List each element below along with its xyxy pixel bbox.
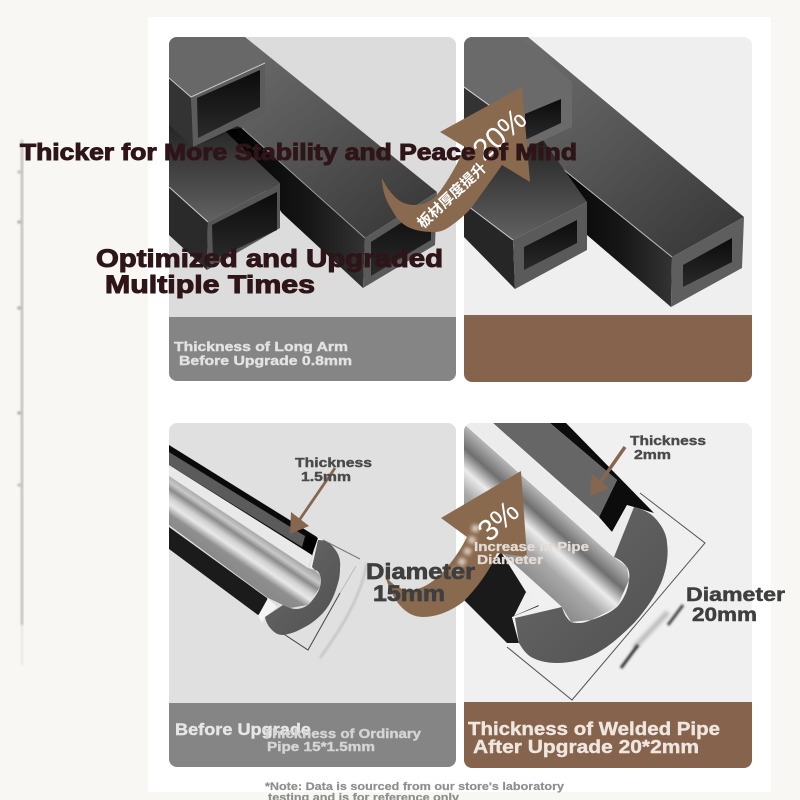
blurred dimension line xyxy=(320,563,367,658)
caption: ordinary pipe: Pipe 15*1.5mm xyxy=(267,739,375,754)
caption: long arm before: Thickness of Long Arm xyxy=(174,339,348,354)
thick upper square tube xyxy=(464,37,572,158)
callout: diameter 15mm xyxy=(366,559,476,606)
panel: long arm before upgrade xyxy=(169,37,456,381)
arrow value: 20% xyxy=(467,102,533,167)
tube shadow backdrop xyxy=(464,60,572,153)
blurred arrow detail xyxy=(454,525,476,574)
heading: optimized and upgraded xyxy=(96,245,443,299)
caption: welded pipe after: Thickness of Welded Pipe xyxy=(468,719,720,739)
callout: diameter 20mm xyxy=(686,585,786,626)
long square tube xyxy=(169,37,437,288)
callout: thickness 2mm xyxy=(630,433,706,462)
panel: ordinary pipe before upgrade xyxy=(169,423,456,767)
thickness arrow xyxy=(590,447,625,496)
arrow label: 板材厚度提升 xyxy=(413,159,490,232)
thickness arrow xyxy=(290,468,335,534)
thick pipe cross-section ring xyxy=(515,507,668,663)
callout: thickness 2mm: Thickness xyxy=(630,433,706,448)
caption: welded pipe after: After Upgrade 20*2mm xyxy=(473,737,699,757)
lower square tube xyxy=(169,125,280,270)
callout: increase in pipe diameter: Diameter xyxy=(477,552,543,567)
caption bar xyxy=(464,702,752,768)
callout: increase in pipe diameter xyxy=(474,539,589,567)
callout: diameter 15mm: Diameter xyxy=(366,559,476,584)
thick lower square tube xyxy=(464,140,587,289)
caption: long arm before: Before Upgrade 0.8mm xyxy=(179,353,352,368)
caption: ordinary pipe xyxy=(263,726,422,754)
caption bar xyxy=(464,315,752,382)
callout: diameter 20mm: 20mm xyxy=(692,605,757,626)
scanned edge stain xyxy=(18,140,22,665)
heading: optimized and upgraded: Optimized and Upgraded xyxy=(96,245,443,273)
callout: diameter 15mm: 15mm xyxy=(373,581,445,606)
caption: welded pipe after xyxy=(468,719,720,757)
heading: optimized and upgraded: Multiple Times xyxy=(105,271,315,299)
arrow: thickness increase 20% xyxy=(382,87,533,232)
footnote xyxy=(265,781,565,800)
caption bar xyxy=(169,703,456,767)
caption: ordinary pipe: Thickness of Ordinary xyxy=(263,726,422,741)
pipe cross-section ring xyxy=(265,540,340,635)
footnote: *Note: Data is sourced from our store's laboratory xyxy=(265,781,565,793)
panel: welded pipe after upgrade xyxy=(464,423,752,768)
arrow value: 3% xyxy=(472,495,526,548)
tube shadow backdrop xyxy=(169,38,242,147)
diameter square outline xyxy=(284,540,360,651)
thick long square tube xyxy=(464,37,744,307)
callout: diameter 20mm: Diameter xyxy=(686,585,786,606)
callout: thickness 1.5mm: 1.5mm xyxy=(301,469,351,484)
diameter square outline xyxy=(507,493,705,700)
arrow: pipe diameter increase xyxy=(385,471,527,617)
callout: thickness 2mm: 2mm xyxy=(634,447,671,462)
title: Thicker for More Stability and Peace of Mind xyxy=(20,139,577,165)
blurred dimension arrow xyxy=(621,605,683,668)
pipe body xyxy=(169,445,322,623)
callout: thickness 1.5mm xyxy=(295,455,372,484)
caption bar xyxy=(169,317,456,381)
thick pipe body xyxy=(464,423,654,657)
caption: long arm before xyxy=(174,339,352,368)
caption: before upgrade: Before Upgrade xyxy=(175,720,311,739)
upper square tube xyxy=(169,37,265,147)
white content area xyxy=(148,17,771,792)
panel: long arm after upgrade xyxy=(464,37,752,382)
callout: increase in pipe diameter: Increase in Pipe xyxy=(474,539,589,554)
callout: thickness 1.5mm: Thickness xyxy=(295,455,372,470)
